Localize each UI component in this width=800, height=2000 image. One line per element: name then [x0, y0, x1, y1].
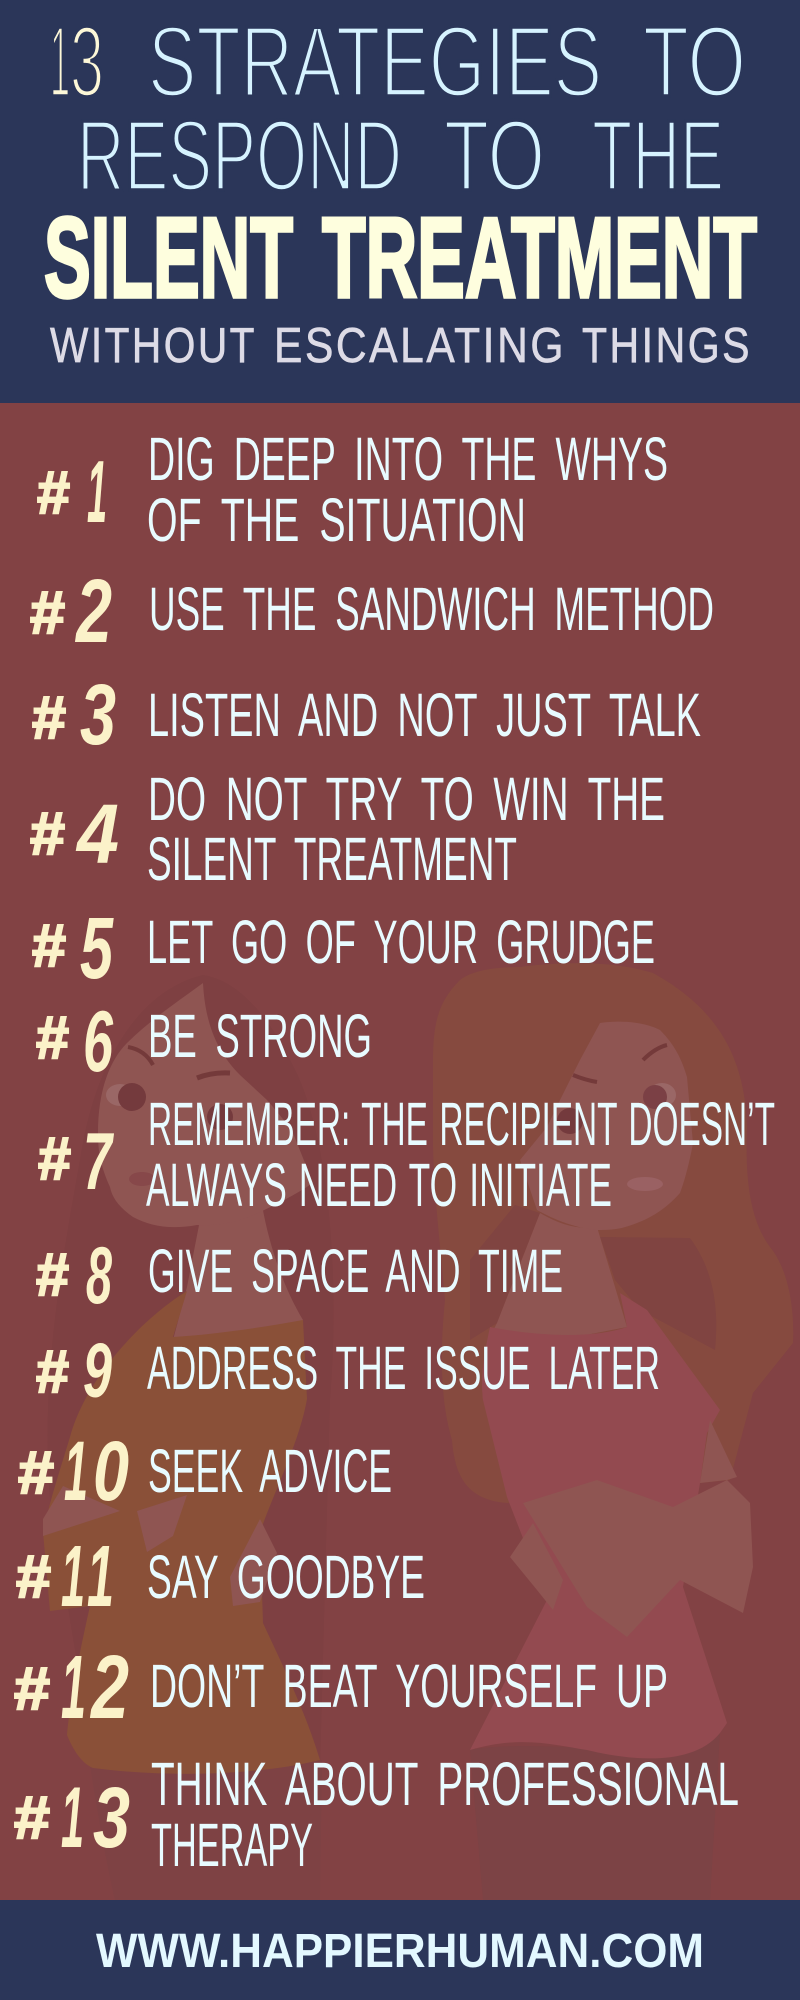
strategy 13: THERAPY	[151, 1811, 313, 1879]
strategy 8: 8	[86, 1231, 112, 1321]
strategy 6: BE STRONG	[148, 1002, 372, 1070]
strategy 5	[32, 900, 655, 997]
heading: silent treatment	[44, 195, 757, 322]
strategy 7: #	[38, 1125, 71, 1192]
strategy 10: 0	[93, 1424, 129, 1518]
panel: list background	[0, 403, 800, 1900]
strategy 6: 6	[83, 994, 114, 1090]
illustration: left woman	[43, 975, 334, 1900]
strategy 4: #	[30, 800, 65, 867]
subheading: ESCALATING	[274, 319, 566, 373]
strategy 11: #	[16, 1543, 51, 1610]
strategy 8: #	[36, 1241, 69, 1308]
strategy 5: #	[32, 912, 66, 979]
subheading: WITHOUT	[50, 319, 257, 373]
subheading: THINGS	[582, 319, 752, 373]
strategy 2: #	[30, 579, 65, 646]
heading line 1: STRATEGIES	[148, 6, 602, 118]
strategy 9: #	[36, 1338, 69, 1405]
panel: footer	[0, 1900, 800, 2000]
heading line 1: TO	[643, 6, 746, 118]
panel: header	[0, 0, 800, 403]
strategy 3: #	[32, 684, 66, 751]
strategy 10	[18, 1424, 392, 1518]
strategy 1: 1	[87, 442, 107, 541]
strategy 10: 1	[64, 1424, 88, 1518]
strategy 7: 7	[83, 1117, 115, 1207]
heading line 1: 1	[50, 6, 70, 118]
strategy 1: #	[37, 459, 70, 526]
illustration: right woman	[433, 963, 793, 1900]
strategy 2: 2	[75, 562, 112, 662]
strategy 2	[30, 562, 714, 662]
strategy 13: 3	[93, 1770, 130, 1866]
strategy 11: 1	[61, 1528, 85, 1625]
strategy 6	[36, 994, 372, 1090]
strategy 5: 5	[80, 900, 114, 997]
strategy 11	[16, 1528, 425, 1625]
strategy 4: 4	[75, 787, 119, 881]
illustration: two women back to back	[43, 963, 793, 1900]
strategy 11: SAY GOODBYE	[147, 1543, 425, 1611]
strategy 12: 2	[89, 1638, 129, 1738]
subheading	[50, 319, 752, 373]
heading line 1: 3	[70, 6, 104, 118]
strategy 13: #	[14, 1784, 50, 1851]
strategy 10: SEEK ADVICE	[148, 1437, 392, 1505]
strategy 3: 3	[80, 667, 116, 763]
strategy 11: 1	[87, 1528, 114, 1625]
strategy 12	[14, 1638, 668, 1738]
strategy 1	[37, 425, 668, 554]
strategy 12: #	[14, 1655, 50, 1722]
strategy 1: OF THE SITUATION	[147, 486, 526, 554]
heading line 2: RESPOND	[77, 100, 402, 212]
strategy 4: SILENT TREATMENT	[147, 825, 517, 893]
footer website url: WWW.HAPPIERHUMAN.COM	[96, 1925, 704, 1978]
heading line 2: TO	[444, 100, 545, 212]
strategy 12: 1	[61, 1638, 86, 1738]
strategy 9	[36, 1328, 660, 1414]
strategy 13: 1	[61, 1770, 84, 1866]
strategy 9: 9	[83, 1328, 112, 1414]
strategy 8	[36, 1231, 563, 1321]
heading: silent treatment: SILENT	[44, 195, 293, 322]
strategy 10: #	[18, 1439, 54, 1506]
strategy 6: #	[36, 1004, 69, 1071]
heading line 2: THE	[592, 100, 724, 212]
strategy 4	[30, 765, 665, 893]
strategy 7	[38, 1090, 775, 1219]
strategy 3	[32, 667, 701, 763]
strategy 13	[14, 1750, 739, 1879]
